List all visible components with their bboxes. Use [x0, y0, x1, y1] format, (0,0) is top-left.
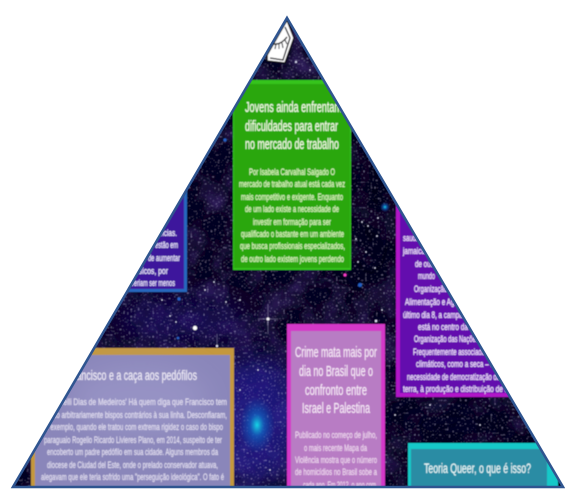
panel text: blue article: físicos, por — [135, 266, 168, 276]
heading: pink article: dia no Brasil que o — [299, 364, 373, 380]
body text: pink article: Publicado no começo de julho, — [295, 430, 377, 441]
body text: green article: que busca profissionais especializados, — [240, 241, 345, 252]
heading: orange article: Papa Francisco e a caça aos pedófilos — [45, 367, 197, 383]
panel text: purple article: Organização das — [414, 284, 458, 294]
panel: purple article (right) — [395, 204, 509, 398]
body text: orange article: encoberto um padre pedófilo em sua cidade. Alguns membros da — [47, 447, 218, 458]
panel text: purple article: saudável e — [403, 233, 432, 243]
panel: green article (top) — [233, 80, 351, 270]
heading: pink article: Israel e Palestina — [302, 401, 371, 417]
body text: orange article: por exemplo, quando ele tratou com extrema rigidez o caso do bispo — [40, 422, 223, 433]
body text: pink article — [295, 430, 377, 491]
icon: eye badge — [267, 20, 294, 63]
panel text: purple article: Alimentação e Agricultura — [405, 297, 477, 307]
body text: green article — [239, 167, 345, 265]
body text: green article: qualificado o bastante em um ambiente — [241, 229, 344, 240]
heading: pink article: confronto entre — [305, 383, 367, 399]
panel text: blue article: ocorrências. — [142, 228, 177, 238]
panel: teal article (bottom right) — [407, 442, 559, 486]
panel: blue article (left) — [128, 190, 188, 293]
body text: orange article: Por Aricelli Dias de Medeiros' Há quem diga que Francisco tem — [40, 397, 227, 408]
panel text: purple article: mundo — [418, 271, 435, 281]
body text: green article: mercado de trabalho atual está cada vez — [239, 179, 345, 190]
heading: green article: Jovens ainda enfrentam — [245, 100, 342, 116]
panel: pink article (centre bottom) — [287, 324, 385, 494]
heading: green article — [245, 100, 342, 153]
body text: orange article: afastado arbitrariamente bispos contrários à sua linha. Desconfiaram, — [36, 410, 227, 421]
panel text: purple article: último dia 8, a campanha — [403, 310, 473, 320]
panel text: purple article: de outros — [415, 259, 441, 269]
panel text: purple article: Organização das Nações Unidas — [414, 334, 498, 344]
heading: pink article — [295, 345, 377, 417]
body text: orange article — [36, 397, 227, 483]
panel text: purple article — [402, 234, 506, 395]
panel text: blue article: de aumentar — [148, 253, 180, 263]
stars — [161, 61, 481, 471]
body text: green article: Por Isabela Carvalhal Salgado O — [249, 167, 335, 178]
body text: pink article: de homicídios no Brasil sobe a — [295, 467, 377, 478]
body text: pink article: Violência mostra que o número — [295, 455, 377, 466]
panel text: purple article: necessidade de democratização da — [407, 372, 500, 382]
body text: green article: mais competitivo e exigente. Enquanto — [241, 192, 343, 203]
panel text: purple article: jamaicana — [402, 246, 432, 256]
panel text: purple article: Frequentemente associada — [413, 347, 485, 357]
body text: orange article: alegavam que ele teria sofrido uma "perseguição ideológica". O fato é — [41, 472, 224, 483]
body text: pink article: o mais recente Mapa da — [304, 443, 367, 454]
panel text: purple article: está no centro da — [418, 322, 468, 332]
body text: orange article: paraguaio Rogelio Ricardo Livieres Plano, em 2014, suspeito de ter — [44, 435, 222, 446]
panel text: blue article: deveriam ser menos — [125, 278, 175, 288]
panel text: purple article: climáticos, como a seca – e — [416, 359, 494, 369]
panel: orange article (bottom left) — [31, 348, 234, 494]
panel text: blue article — [132, 228, 181, 287]
body text: green article: de outro lado existem jovens perdendo — [241, 254, 344, 265]
heading: green article: dificuldades para entrar — [245, 119, 338, 135]
body text: pink article: cada ano. Em 2012, o ano com — [303, 480, 376, 491]
body text: orange article: diocese de Ciudad del Este, onde o prelado conservador atuava, — [47, 460, 218, 471]
body text: green article: de um lado existe a necessidade de — [245, 204, 339, 215]
heading: pink article: Crime mata mais por — [295, 345, 377, 361]
panel text: blue article: estão em — [155, 240, 178, 250]
body text: green article: investir em formação para ser — [253, 217, 331, 228]
heading: green article: no mercado de trabalho — [245, 137, 339, 153]
